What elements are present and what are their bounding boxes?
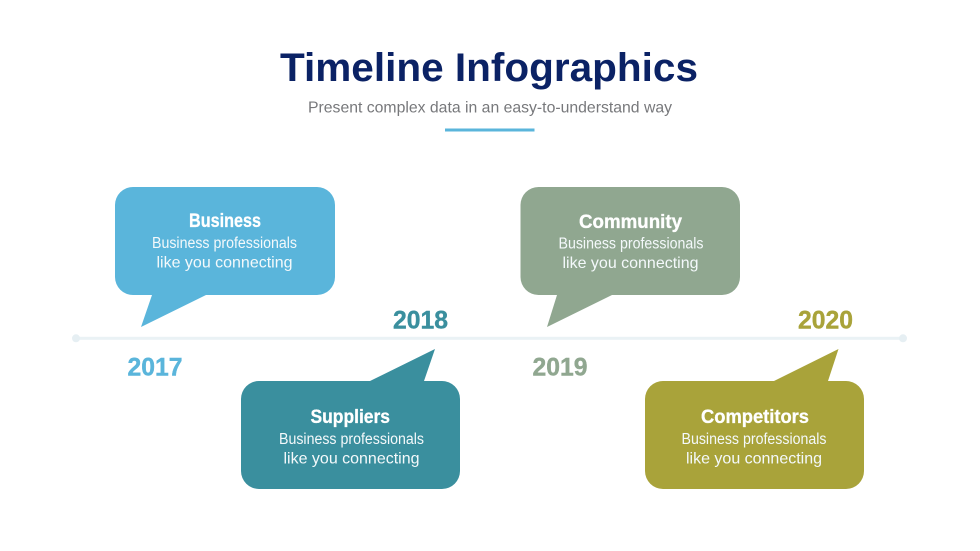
timeline axis	[72, 334, 907, 342]
panel: Business callout	[115, 187, 335, 327]
subtitle: Present complex data in an easy-to-understand way	[308, 100, 672, 116]
speech bubble: Suppliers	[241, 349, 460, 489]
title: Timeline Infographics	[280, 46, 698, 90]
year 2020: 2020	[798, 306, 853, 334]
speech bubble: Community	[520, 187, 740, 327]
year 2017: 2017	[128, 354, 182, 382]
panel: Suppliers callout	[241, 349, 460, 489]
heading: Competitors: Competitors	[701, 407, 809, 428]
text: Community description	[558, 236, 704, 272]
text: Suppliers description: Business professionals	[279, 431, 424, 448]
panel: Community callout	[520, 187, 740, 327]
heading: Business: Business	[189, 211, 261, 232]
heading: Community: Community	[579, 212, 682, 233]
speech bubble: Competitors	[645, 349, 864, 489]
title underline	[445, 128, 534, 132]
panel: Competitors callout	[645, 349, 864, 489]
year 2018: 2018	[393, 306, 448, 334]
text: Competitors description: Business professionals	[682, 431, 827, 448]
text: Competitors description	[682, 431, 827, 468]
text: Competitors description: like you connecting	[686, 450, 822, 468]
text: Business description: Business professionals	[152, 235, 297, 252]
heading: Suppliers: Suppliers	[310, 407, 390, 428]
text: Suppliers description	[279, 431, 424, 468]
text: Suppliers description: like you connecting	[284, 450, 420, 468]
text: Business description	[152, 235, 297, 272]
speech bubble: Business	[115, 187, 335, 327]
text: Business description: like you connecting	[156, 254, 292, 272]
text: Community description: like you connecting	[562, 255, 698, 272]
year 2019: 2019	[532, 354, 588, 382]
text: Community description: Business professionals	[558, 236, 704, 252]
